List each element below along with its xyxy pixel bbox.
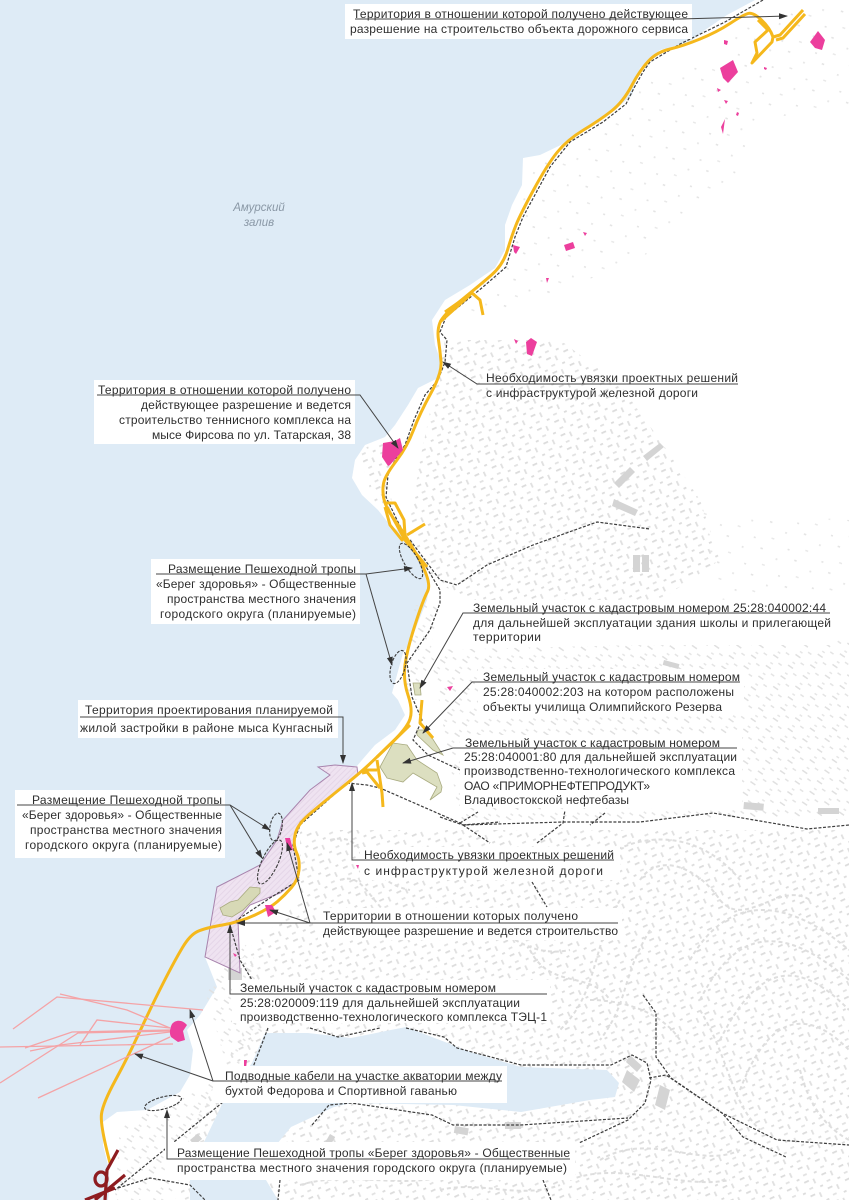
- callout: plot 25:28:040002:44: территории: [473, 630, 541, 644]
- callout: plot 25:28:040002:203: объекты училища Олимпийского Резерва: [483, 700, 722, 714]
- callout: plot 25:28:040002:44: для дальнейшей эксплуатации здания школы и прилегающей: [473, 616, 831, 630]
- callout: railway coordination south: [352, 783, 620, 880]
- callout: subsea cables: Подводные кабели на участке акватории между: [225, 1069, 502, 1083]
- callout: tennis complex: действующее разрешение и ведется: [141, 398, 351, 412]
- callout: construction in progress: Территории в отношении которых получено: [323, 909, 578, 923]
- callout: plot 25:28:040001:80: 25:28:040001:80 для дальнейшей эксплуатации: [464, 750, 737, 764]
- land plot: Primornefteprodukt oil base: [380, 743, 442, 800]
- callout: plot 25:28:020009:119: Земельный участок с кадастровым номером: [240, 981, 496, 995]
- callout: plot 25:28:020009:119: 25:28:020009:119 для дальнейшей эксплуатации: [240, 996, 520, 1010]
- callout: Cape Kungasny housing: жилой застройки в районе мыса Кунгасный: [80, 721, 333, 735]
- callout: walking trail north: Размещение Пешеходной тропы: [168, 562, 356, 576]
- planned road: main yellow route: [101, 10, 805, 1163]
- callout: walking trail north: городского округа (планируемые): [160, 607, 356, 621]
- industrial buildings: [190, 443, 839, 1151]
- callout: walking trail middle: Размещение Пешеходной тропы: [32, 793, 222, 807]
- callout: walking trail middle: «Берег здоровья» - Общественные: [22, 808, 222, 822]
- callout: road service facility: Территория в отношении которой получено действующее: [353, 7, 688, 21]
- callout: plot 25:28:040002:203: 25:28:040002:203 на котором расположены: [483, 685, 734, 699]
- callout: tennis complex: мысе Фирсова по ул. Татарская, 38: [152, 428, 351, 442]
- walking trail ovals: [143, 540, 427, 1114]
- callout: railway coordination north: [443, 362, 738, 400]
- callout: walking trail south: [165, 1110, 575, 1180]
- callout: plot 25:28:020009:119: производственно-технологического комплекса ТЭЦ-1: [240, 1010, 547, 1024]
- callout: plot 25:28:040002:44: Земельный участок с кадастровым номером 25:28:040002:44: [473, 601, 826, 615]
- callout: railway coordination south: Необходимость увязки проектных решений: [364, 848, 614, 862]
- callout: railway coordination north: с инфраструктурой железной дороги: [486, 386, 698, 400]
- callout: walking trail middle: городского округа (планируемые): [25, 838, 222, 852]
- callout: plot 25:28:020009:119: [230, 925, 550, 1024]
- callout: walking trail middle: [15, 790, 270, 858]
- callout: construction in progress: действующее разрешение и ведется строительство: [323, 924, 618, 938]
- callout: Cape Kungasny housing: [78, 700, 343, 763]
- callout: road service facility: разрешение на строительство объекта дорожного сервиса: [350, 22, 688, 36]
- callout: plot 25:28:040002:44: [420, 600, 835, 688]
- callout: tennis complex: Территория в отношении которой получено: [98, 383, 351, 397]
- callout: plot 25:28:040001:80: [403, 735, 742, 808]
- callout: tennis complex: [94, 380, 398, 448]
- land plot: TEC-1: [220, 887, 260, 917]
- territory: Cape Kungasny planned housing: [205, 765, 358, 973]
- callout: walking trail north: [151, 559, 412, 665]
- callout: subsea cables: бухтой Федорова и Спортивной гаванью: [225, 1084, 457, 1098]
- callout: construction in progress: [237, 843, 622, 940]
- callout: walking trail south: Размещение Пешеходной тропы «Берег здоровья» - Общественные: [177, 1146, 570, 1160]
- callout: plot 25:28:040002:203: Земельный участок с кадастровым номером: [483, 670, 740, 684]
- callout: Cape Kungasny housing: Территория проектирования планируемой: [85, 703, 333, 717]
- land plot: school 25:28:040002:44: [413, 683, 421, 695]
- callout: plot 25:28:040001:80: Земельный участок с кадастровым номером: [465, 736, 720, 750]
- label: Amur Bay: Амурский: [232, 202, 285, 214]
- terrain contours of building rows: [300, 839, 849, 1191]
- callout: walking trail middle: пространства местного значения: [30, 823, 222, 837]
- callout: railway coordination north: Необходимость увязки проектных решений: [486, 371, 738, 385]
- callout: plot 25:28:040002:203: [423, 669, 744, 733]
- callout: plot 25:28:040001:80: Владивостокской нефтебазы: [464, 793, 629, 807]
- cluster of dark red interchange: [85, 1150, 125, 1200]
- callout: plot 25:28:040001:80: производственно-технологического комплекса: [464, 764, 735, 778]
- callout: railway coordination south: с инфраструктурой железной дороги: [364, 864, 603, 878]
- land plot: Olympic Reserve school: [417, 730, 443, 755]
- callout: walking trail north: «Берег здоровья» - Общественные: [156, 577, 356, 591]
- label: Amur Bay: [232, 202, 285, 229]
- callout: subsea cables: [135, 1010, 507, 1103]
- callout: tennis complex: строительство теннисного комплекса на: [119, 413, 351, 427]
- permitted construction sites (magenta): [170, 31, 825, 1068]
- water: Golden Horn bay: [190, 1027, 619, 1200]
- label: Amur Bay: залив: [243, 217, 274, 229]
- callout: walking trail north: пространства местного значения: [167, 592, 356, 606]
- callout: plot 25:28:040001:80: ОАО «ПРИМОРНЕФТЕПРОДУКТ»: [464, 779, 650, 793]
- callout: road service facility: [345, 4, 787, 39]
- callout: walking trail south: пространства местного значения городского округа (планируемые): [177, 1161, 567, 1175]
- subsea cables: [0, 994, 203, 1098]
